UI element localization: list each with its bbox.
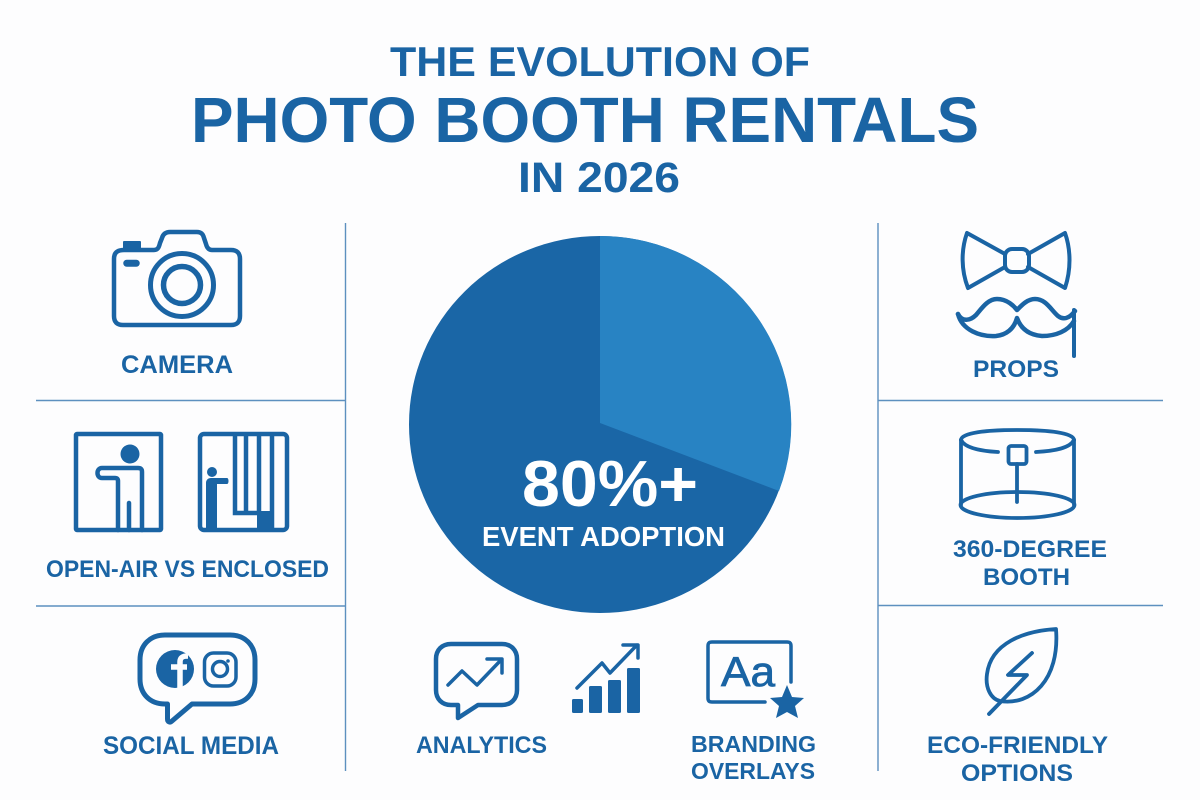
panel: props: [958, 233, 1075, 383]
label: analytics: ANALYTICS: [416, 732, 547, 759]
pie chart: event adoption: [409, 236, 791, 613]
icon: social bubble: [140, 635, 255, 722]
icon text: Aa: Aa: [721, 648, 776, 695]
panel: 360-degree booth: [953, 430, 1107, 591]
label: social media: SOCIAL MEDIA: [103, 732, 279, 760]
panel: social media: [103, 635, 279, 760]
label: branding overlays: BRANDING: [691, 731, 816, 757]
icon: branding frame: [708, 642, 804, 718]
panel: branding overlays: [691, 642, 816, 784]
icon: camera: [114, 232, 240, 325]
label: 360-degree booth: 360-DEGREE: [953, 536, 1107, 563]
title: IN 2026: [518, 154, 680, 202]
panel: open-air vs enclosed: [46, 434, 329, 583]
panel: camera: [114, 232, 240, 379]
label: open-air vs enclosed: OPEN-AIR VS ENCLOSED: [46, 556, 329, 583]
title: THE EVOLUTION OF: [390, 38, 810, 85]
label: eco-friendly options: OPTIONS: [961, 760, 1073, 787]
icon: leaf with bolt: [987, 629, 1056, 714]
icon: bar chart with arrow: [572, 645, 640, 713]
icon: enclosed booth: [200, 434, 287, 531]
icon: analytics bubble: [436, 644, 517, 718]
title: PHOTO BOOTH RENTALS: [191, 84, 979, 156]
label: event adoption: EVENT ADOPTION: [482, 521, 725, 552]
label: eco-friendly options: [927, 732, 1108, 787]
icon: open-air booth: [76, 434, 161, 530]
panel: eco-friendly options: [927, 629, 1108, 787]
label: eco-friendly options: ECO-FRIENDLY: [927, 732, 1108, 759]
label: branding overlays: [691, 731, 816, 784]
label: 360-degree booth: BOOTH: [983, 564, 1070, 591]
label: props: PROPS: [973, 356, 1059, 383]
icon: bow tie and moustache: [958, 233, 1075, 356]
label: 360-degree booth: [953, 536, 1107, 591]
stat: 80%+: 80%+: [522, 447, 698, 520]
icon: 360 platform: [960, 430, 1074, 518]
panel: analytics: [416, 644, 547, 759]
title: [191, 38, 979, 202]
label: branding overlays: OVERLAYS: [691, 758, 815, 784]
label: camera: CAMERA: [121, 351, 233, 379]
